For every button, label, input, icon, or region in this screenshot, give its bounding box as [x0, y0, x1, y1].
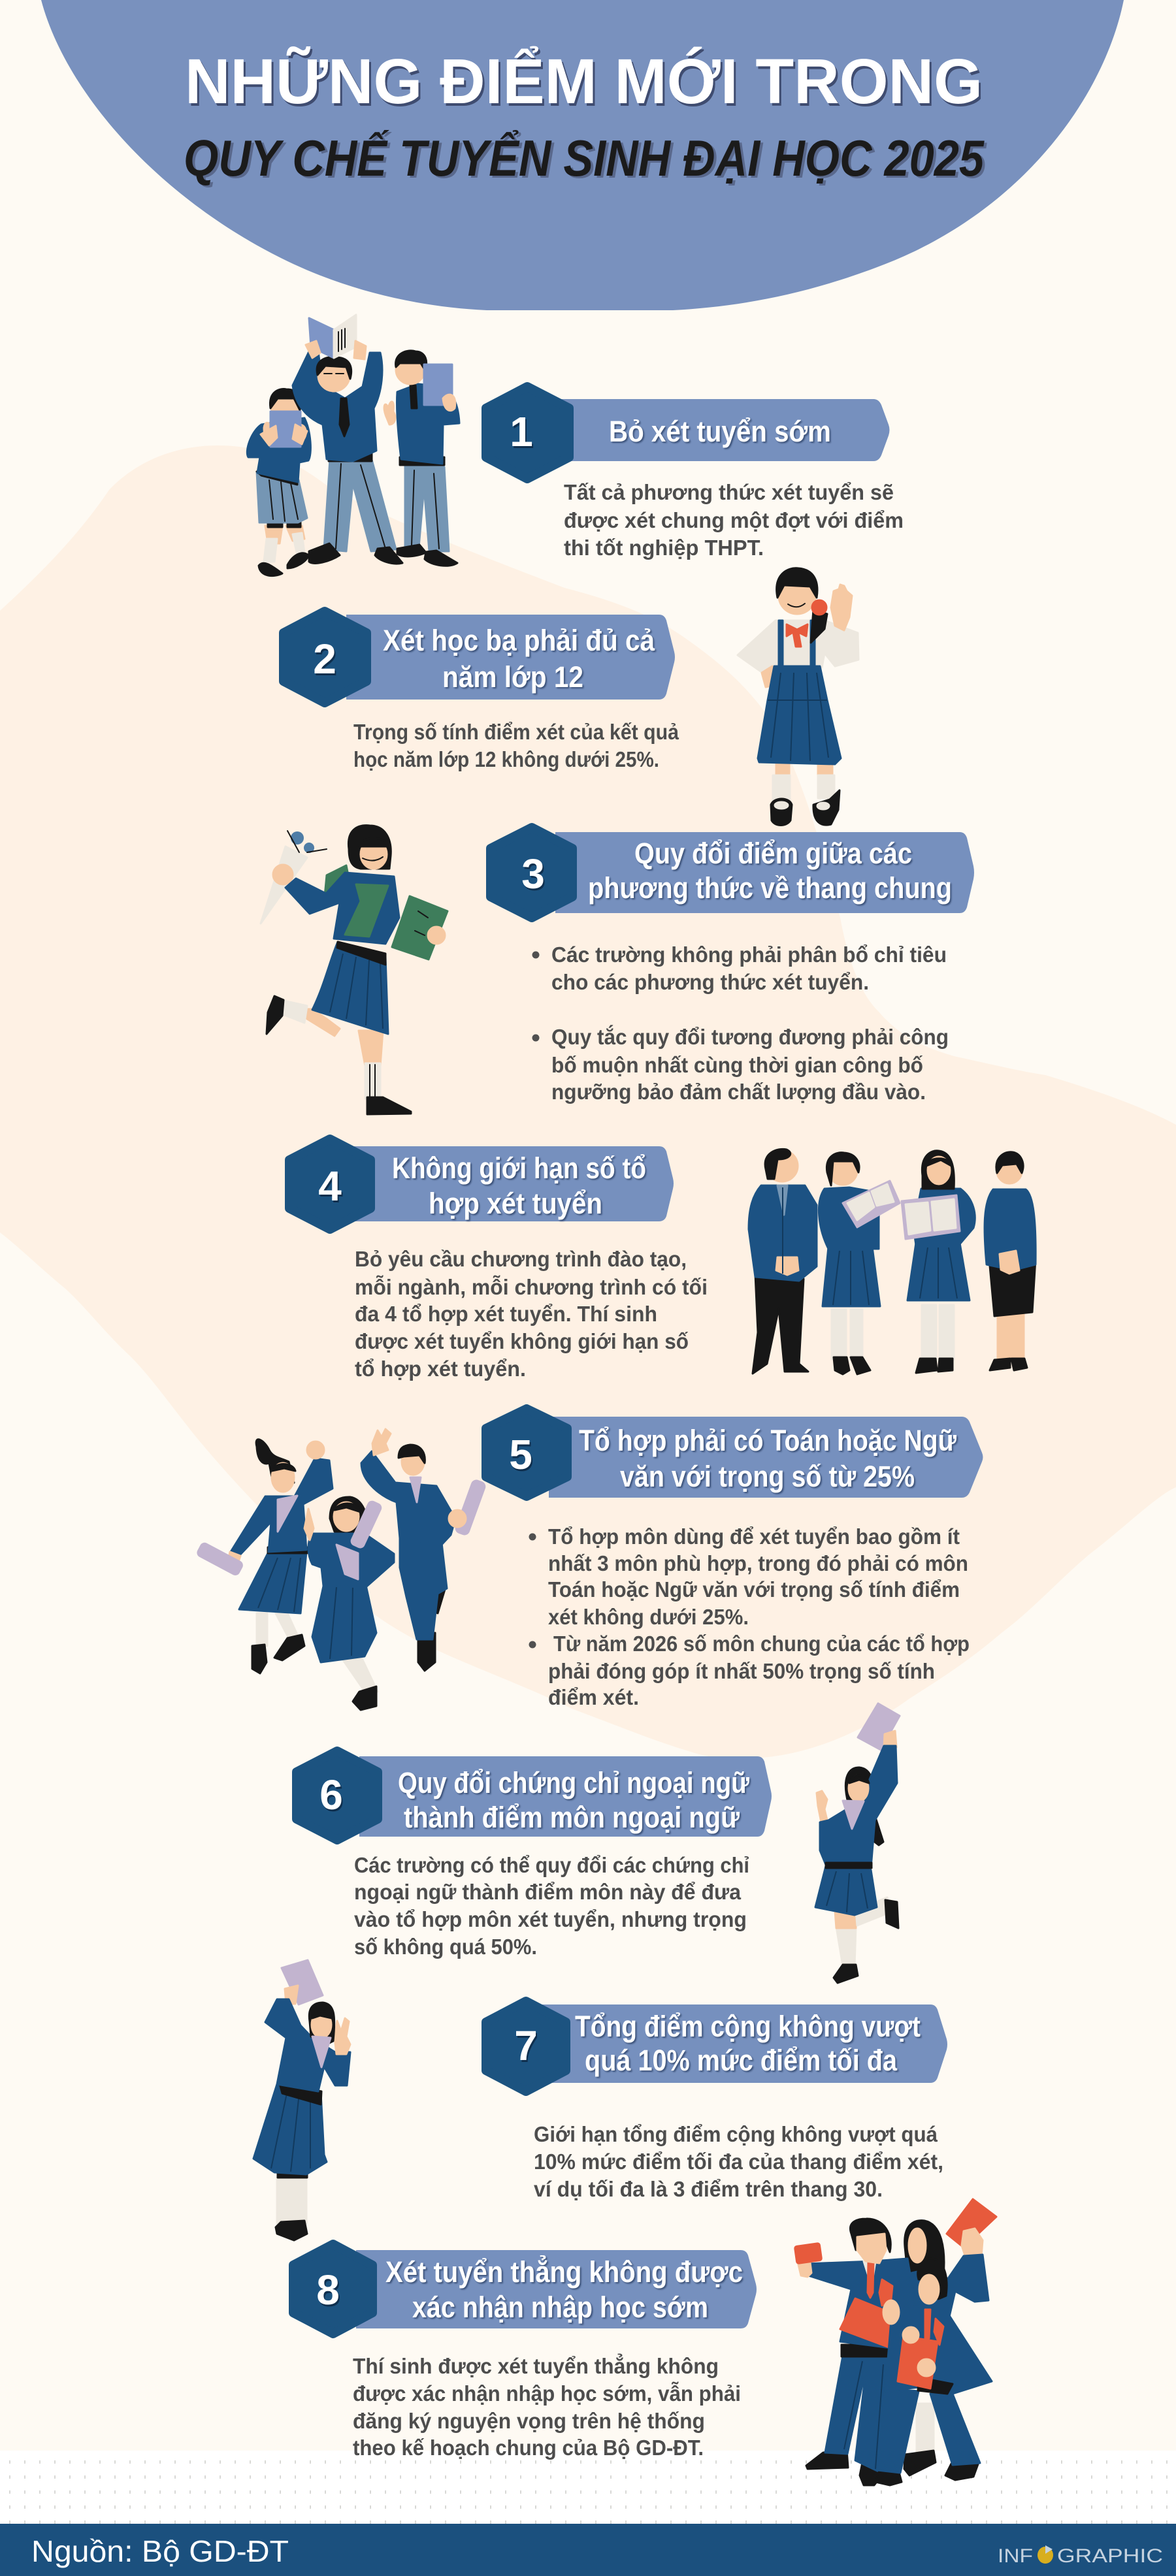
body 6: Các trường có thể quy đổi các chứng chỉ — [354, 1853, 749, 1877]
item 6 — [297, 1751, 772, 1959]
body 2: học năm lớp 12 không dưới 25%. — [353, 747, 659, 771]
body 3 bullets: cho các phương thức xét tuyển. — [551, 970, 869, 994]
heading 4: hợp xét tuyển — [429, 1187, 602, 1220]
body 6: vào tổ hợp môn xét tuyển, nhưng trọng — [354, 1907, 747, 1931]
heading 5: Tổ hợp phải có Toán hoặc Ngữ — [579, 1424, 956, 1457]
illustration: girl waving — [738, 568, 858, 826]
body 4: mỗi ngành, mỗi chương trình có tối — [355, 1275, 708, 1299]
heading 2: năm lớp 12 — [442, 660, 583, 694]
number 2: 2 — [313, 636, 336, 683]
body 5 bullets: Toán hoặc Ngữ văn với trọng số tính điểm — [548, 1577, 960, 1602]
body 4: được xét tuyển không giới hạn số — [355, 1329, 689, 1353]
body 6 — [354, 1853, 749, 1959]
badge 4 — [289, 1139, 370, 1229]
heading 8: Xét tuyển thẳng không được — [385, 2255, 743, 2289]
heading 3: phương thức về thang chung — [588, 871, 952, 905]
body 7: 10% mức điểm tối đa của thang điểm xét, — [534, 2149, 943, 2174]
body 4: Bỏ yêu cầu chương trình đào tạo, — [355, 1247, 687, 1271]
body 5 bullets: phải đóng góp ít nhất 50% trọng số tính — [548, 1659, 935, 1683]
body 8: theo kế hoạch chung của Bộ GD-ĐT. — [353, 2436, 704, 2460]
body 7: Giới hạn tổng điểm cộng không vượt quá — [534, 2122, 938, 2146]
banner 3 — [555, 832, 974, 913]
body 3 bullets: bố muộn nhất cùng thời gian công bố — [551, 1053, 923, 1077]
infographic logo: INF — [998, 2545, 1033, 2567]
title line 2: QUY CHẾ TUYỂN SINH ĐẠI HỌC 2025 — [184, 129, 985, 187]
body 7 — [534, 2122, 943, 2201]
body 5 bullets: xét không dưới 25%. — [548, 1605, 749, 1629]
banner 7 — [542, 2004, 947, 2083]
illustration: girl raising paper, jumping — [815, 1703, 900, 1983]
infographic logo: GRAPHIC — [1057, 2545, 1163, 2567]
banner 6 — [359, 1756, 772, 1837]
heading 7: Tổng điểm cộng không vượt — [575, 2010, 921, 2043]
illustration: three students reading — [247, 315, 459, 576]
banner 4 — [353, 1146, 674, 1221]
body 3 bullets: ngưỡng bảo đảm chất lượng đầu vào. — [551, 1080, 926, 1104]
source credit: Nguồn: Bộ GD-ĐT — [31, 2534, 289, 2568]
body 3 bullets: Các trường không phải phân bổ chỉ tiêu — [551, 942, 947, 967]
heading 7 — [575, 2010, 921, 2077]
item 1 — [486, 387, 904, 560]
number 4: 4 — [318, 1163, 342, 1210]
body 3 bullets — [532, 942, 949, 1104]
body 3 bullets: Quy tắc quy đổi tương đương phải công — [551, 1025, 949, 1049]
heading 3: Quy đổi điểm giữa các — [634, 837, 912, 870]
body 7: ví dụ tối đa là 3 điểm trên thang 30. — [534, 2177, 883, 2201]
item 4 — [289, 1139, 708, 1381]
illustration: three students with red books taking a selfie — [794, 2199, 996, 2485]
heading 8: xác nhận nhập học sớm — [412, 2291, 708, 2324]
heading 8 — [385, 2255, 743, 2324]
heading 6 — [398, 1766, 749, 1834]
item 5 — [486, 1409, 983, 1709]
body 5 bullets: điểm xét. — [548, 1685, 639, 1709]
body 6: số không quá 50%. — [354, 1935, 537, 1959]
item 7 — [486, 2001, 947, 2201]
body 4: tổ hợp xét tuyển. — [355, 1357, 526, 1381]
body 8: đăng ký nguyện vọng trên hệ thống — [353, 2409, 705, 2433]
banner 1 — [549, 399, 890, 461]
body 8 — [353, 2353, 741, 2460]
illustration: three jumping graduates — [197, 1429, 486, 1710]
heading 2 — [383, 624, 655, 694]
number 3: 3 — [521, 850, 545, 897]
number 6: 6 — [319, 1771, 343, 1818]
body 5 bullets: Từ năm 2026 số môn chung của các tổ hợp — [553, 1632, 970, 1656]
heading 1: Bỏ xét tuyển sớm — [609, 415, 831, 448]
item 2 — [284, 611, 679, 771]
body 2 — [353, 720, 679, 771]
item 3 — [491, 828, 974, 1104]
illustration: teachers and students with diplomas — [749, 1149, 1036, 1374]
heading 4 — [392, 1151, 646, 1220]
badge 5 — [486, 1409, 567, 1496]
body 5 bullets — [529, 1524, 970, 1709]
infographic logo — [998, 2545, 1163, 2567]
banner 2 — [346, 615, 675, 700]
illustration: girl raising paper, peace sign — [253, 1960, 350, 2240]
body 4 — [355, 1247, 708, 1381]
number 5: 5 — [509, 1431, 532, 1478]
heading 3 — [588, 837, 952, 905]
body 1: Tất cả phương thức xét tuyển sẽ — [564, 480, 894, 504]
illustration: girl with bouquet and green folder — [261, 826, 448, 1114]
heading 5 — [579, 1424, 956, 1493]
number 1: 1 — [510, 408, 533, 455]
body 8: được xác nhận nhập học sớm, vẫn phải — [353, 2381, 741, 2406]
body 1 — [564, 480, 904, 560]
banner 8 — [356, 2250, 757, 2328]
body 1: thi tốt nghiệp THPT. — [564, 536, 764, 560]
body 6: ngoại ngữ thành điểm môn này để đưa — [354, 1880, 742, 1904]
badge 7 — [486, 2001, 566, 2091]
title line 1: NHỮNG ĐIỂM MỚI TRONG — [185, 46, 983, 117]
heading 2: Xét học bạ phải đủ cả — [383, 624, 655, 657]
heading 5: văn với trọng số từ 25% — [620, 1460, 915, 1493]
body 2: Trọng số tính điểm xét của kết quả — [353, 720, 679, 744]
badge 3 — [491, 828, 572, 918]
body 5 bullets: Tổ hợp môn dùng để xét tuyển bao gồm ít — [548, 1524, 960, 1549]
number 7: 7 — [514, 2022, 538, 2069]
body 1: được xét chung một đợt với điểm — [564, 508, 904, 532]
body 5 bullets: nhất 3 môn phù hợp, trong đó phải có môn — [548, 1551, 968, 1575]
banner 5 — [549, 1417, 983, 1498]
heading 7: quá 10% mức điểm tối đa — [585, 2044, 898, 2077]
number 8: 8 — [316, 2266, 340, 2313]
item 8 — [293, 2244, 757, 2460]
badge 1 — [486, 387, 569, 479]
heading 6: Quy đổi chứng chỉ ngoại ngữ — [398, 1766, 749, 1799]
badge 6 — [297, 1751, 378, 1840]
header: blue ellipse with title — [41, 0, 1124, 310]
heading 6: thành điểm môn ngoại ngữ — [404, 1801, 740, 1834]
body 8: Thí sinh được xét tuyển thẳng không — [353, 2353, 719, 2378]
badge 2 — [284, 611, 367, 703]
footer bar — [0, 2524, 1176, 2576]
badge 8 — [293, 2244, 372, 2334]
heading 4: Không giới hạn số tổ — [392, 1151, 646, 1185]
body 4: đa 4 tổ hợp xét tuyển. Thí sinh — [355, 1302, 657, 1326]
